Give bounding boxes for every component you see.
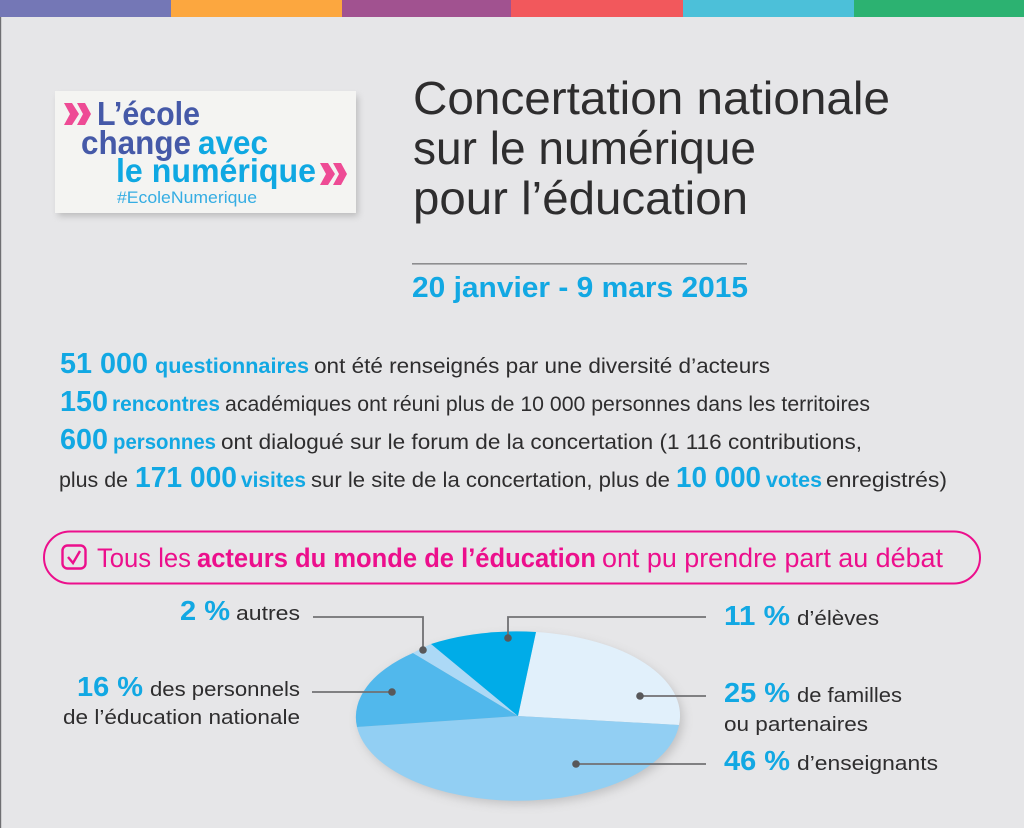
logo line 2: avec: [198, 124, 268, 161]
slice: 16% staff: [356, 653, 518, 727]
leader: students: [504, 617, 706, 642]
figures line 4: votes: [766, 469, 822, 492]
figures line 3: 600: [60, 424, 108, 456]
figures line 2: 150: [60, 386, 108, 418]
banner text: Tous les: [97, 543, 191, 573]
figures line 3: [60, 424, 862, 456]
label: 46% teachers: d’enseignants: [797, 753, 938, 775]
leader: others: [313, 617, 427, 654]
logo line 2: change: [81, 124, 191, 161]
figures line 4: 10 000: [676, 462, 761, 494]
logo line 1: L’école: [97, 95, 200, 132]
key figures text block: [59, 348, 947, 494]
label: 2% others: 2 %: [180, 595, 230, 626]
logo line 3: le numérique: [116, 152, 316, 189]
label: 16% staff: [63, 671, 300, 729]
figures line 4: 171 000: [135, 462, 237, 494]
label: 16% staff: 16 %: [77, 671, 143, 702]
figures line 1: 51 000: [60, 348, 148, 380]
slice: 11% students: [431, 631, 536, 716]
icon: checkbox: [62, 546, 86, 568]
leader: teachers: [572, 760, 706, 768]
icon: right chevrons: [320, 163, 347, 185]
leader: staff: [312, 688, 396, 696]
leader: families: [636, 692, 706, 700]
logo line 2: [81, 124, 268, 161]
slice: 46% teachers: [357, 716, 679, 801]
logo panel: [55, 91, 358, 216]
slice: 2% others: [413, 644, 518, 716]
icon: left chevrons: [64, 103, 91, 125]
top colour bar: [0, 0, 1024, 17]
title: [413, 72, 890, 224]
figures line 4: sur le site de la concertation, plus de: [311, 469, 670, 492]
title: pour l’éducation: [413, 172, 748, 224]
figures line 1: ont été renseignés par une diversité d’acteurs: [314, 355, 770, 378]
label: 16% staff: des personnels: [150, 679, 300, 701]
figures line 4: plus de: [59, 469, 128, 492]
banner text: acteurs du monde de l’éducation: [197, 543, 596, 573]
figures line 2: rencontres: [112, 393, 220, 416]
title: Concertation nationale: [413, 72, 890, 124]
slice: 25% families: [518, 632, 680, 725]
title: sur le numérique: [413, 122, 756, 174]
banner text: ont pu prendre part au débat: [602, 543, 943, 573]
figures line 1: questionnaires: [155, 355, 309, 378]
figures line 2: académiques ont réuni plus de 10 000 personnes dans les territoires: [225, 393, 870, 416]
label: 25% families: ou partenaires: [724, 714, 868, 736]
label: 25% families: [724, 677, 902, 736]
label: 25% families: 25 %: [724, 677, 790, 708]
label: 2% others: [180, 595, 300, 626]
callout banner: [44, 532, 980, 584]
label: 46% teachers: 46 %: [724, 745, 790, 776]
figures line 4: [59, 462, 947, 494]
banner text: [97, 543, 943, 573]
pie chart: [356, 631, 683, 804]
label: 2% others: autres: [236, 603, 300, 625]
figures line 3: personnes: [113, 431, 216, 454]
label: 25% families: de familles: [797, 685, 902, 707]
label: 11% students: d’élèves: [797, 608, 879, 630]
figures line 4: visites: [241, 469, 306, 492]
hashtag: #EcoleNumerique: [117, 188, 257, 207]
figures line 2: [60, 386, 870, 418]
label: 46% teachers: [724, 745, 938, 776]
label: 11% students: [724, 600, 879, 631]
figures line 1: [60, 348, 770, 380]
label: 16% staff: de l’éducation nationale: [63, 707, 300, 729]
date: 20 janvier - 9 mars 2015: [412, 272, 748, 304]
figures line 4: enregistrés): [826, 469, 947, 492]
label: 11% students: 11 %: [724, 600, 790, 631]
figures line 3: ont dialogué sur le forum de la concertation (1 116 contributions,: [221, 431, 862, 454]
